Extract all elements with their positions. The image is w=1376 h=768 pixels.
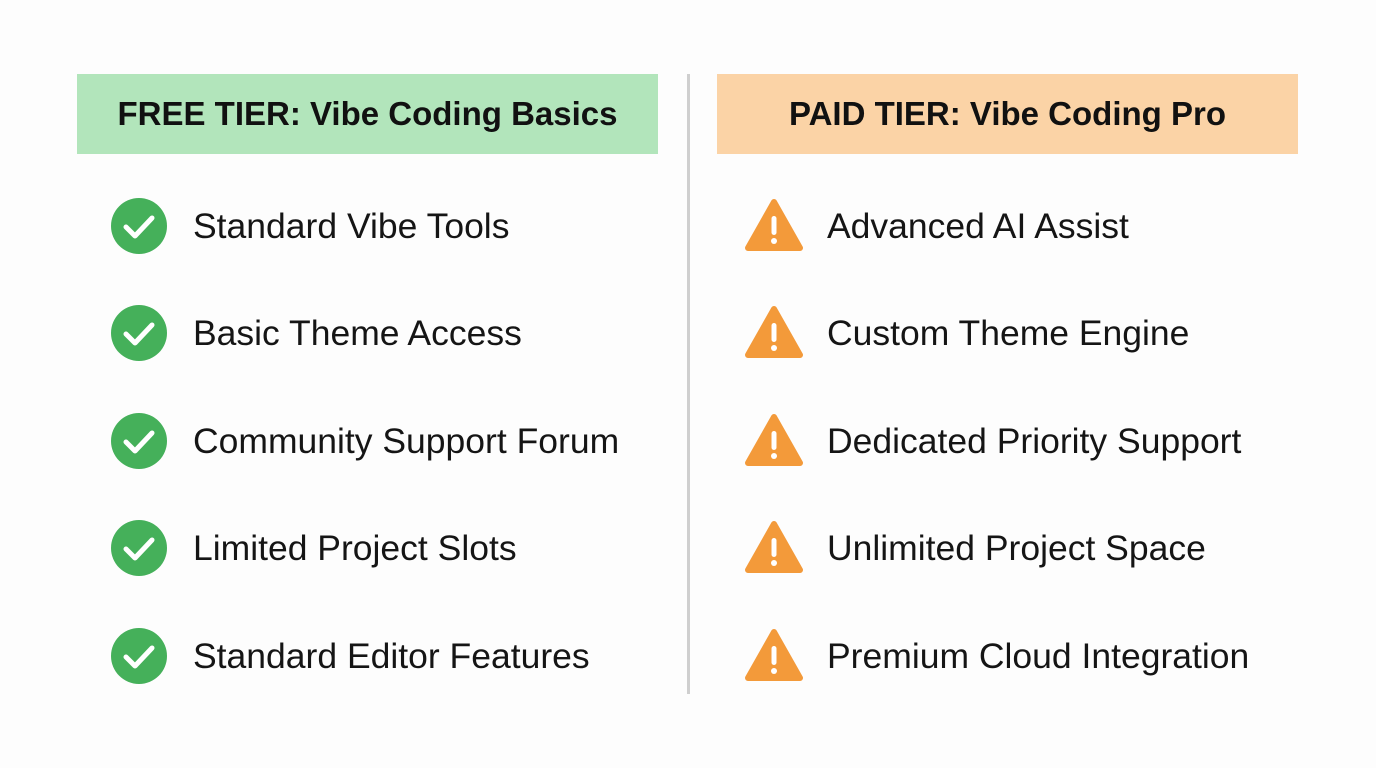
item: Basic Theme Access <box>111 305 522 361</box>
item: Custom Theme Engine: Custom Theme Engine <box>827 312 1189 352</box>
header: paid tier: PAID TIER: Vibe Coding Pro <box>789 95 1226 132</box>
item: Unlimited Project Space: Unlimited Project Space <box>827 528 1206 568</box>
header: free tier <box>77 74 658 154</box>
item: Standard Editor Features: Standard Editor Features <box>193 636 590 676</box>
item: Community Support Forum <box>111 413 619 469</box>
item: Standard Editor Features <box>111 628 590 684</box>
list: paid features <box>745 199 1249 681</box>
item: Standard Vibe Tools: Standard Vibe Tools <box>193 206 509 246</box>
list: free features <box>111 198 619 684</box>
item: Advanced AI Assist <box>745 199 1129 251</box>
divider <box>687 74 690 694</box>
item: Limited Project Slots <box>111 520 517 576</box>
item: Standard Vibe Tools <box>111 198 509 254</box>
item: Premium Cloud Integration <box>745 629 1249 681</box>
item: Advanced AI Assist: Advanced AI Assist <box>827 206 1129 246</box>
item: Unlimited Project Space <box>745 521 1206 573</box>
item: Basic Theme Access: Basic Theme Access <box>193 312 522 352</box>
item: Dedicated Priority Support <box>745 414 1242 466</box>
item: Limited Project Slots: Limited Project Slots <box>193 528 517 568</box>
item: Custom Theme Engine <box>745 306 1189 358</box>
header: free tier: FREE TIER: Vibe Coding Basics <box>118 95 617 132</box>
header: paid tier <box>717 74 1298 154</box>
item: Community Support Forum: Community Support Forum <box>193 420 619 460</box>
item: Dedicated Priority Support: Dedicated Priority Support <box>827 420 1241 460</box>
item: Premium Cloud Integration: Premium Cloud Integration <box>827 636 1249 676</box>
